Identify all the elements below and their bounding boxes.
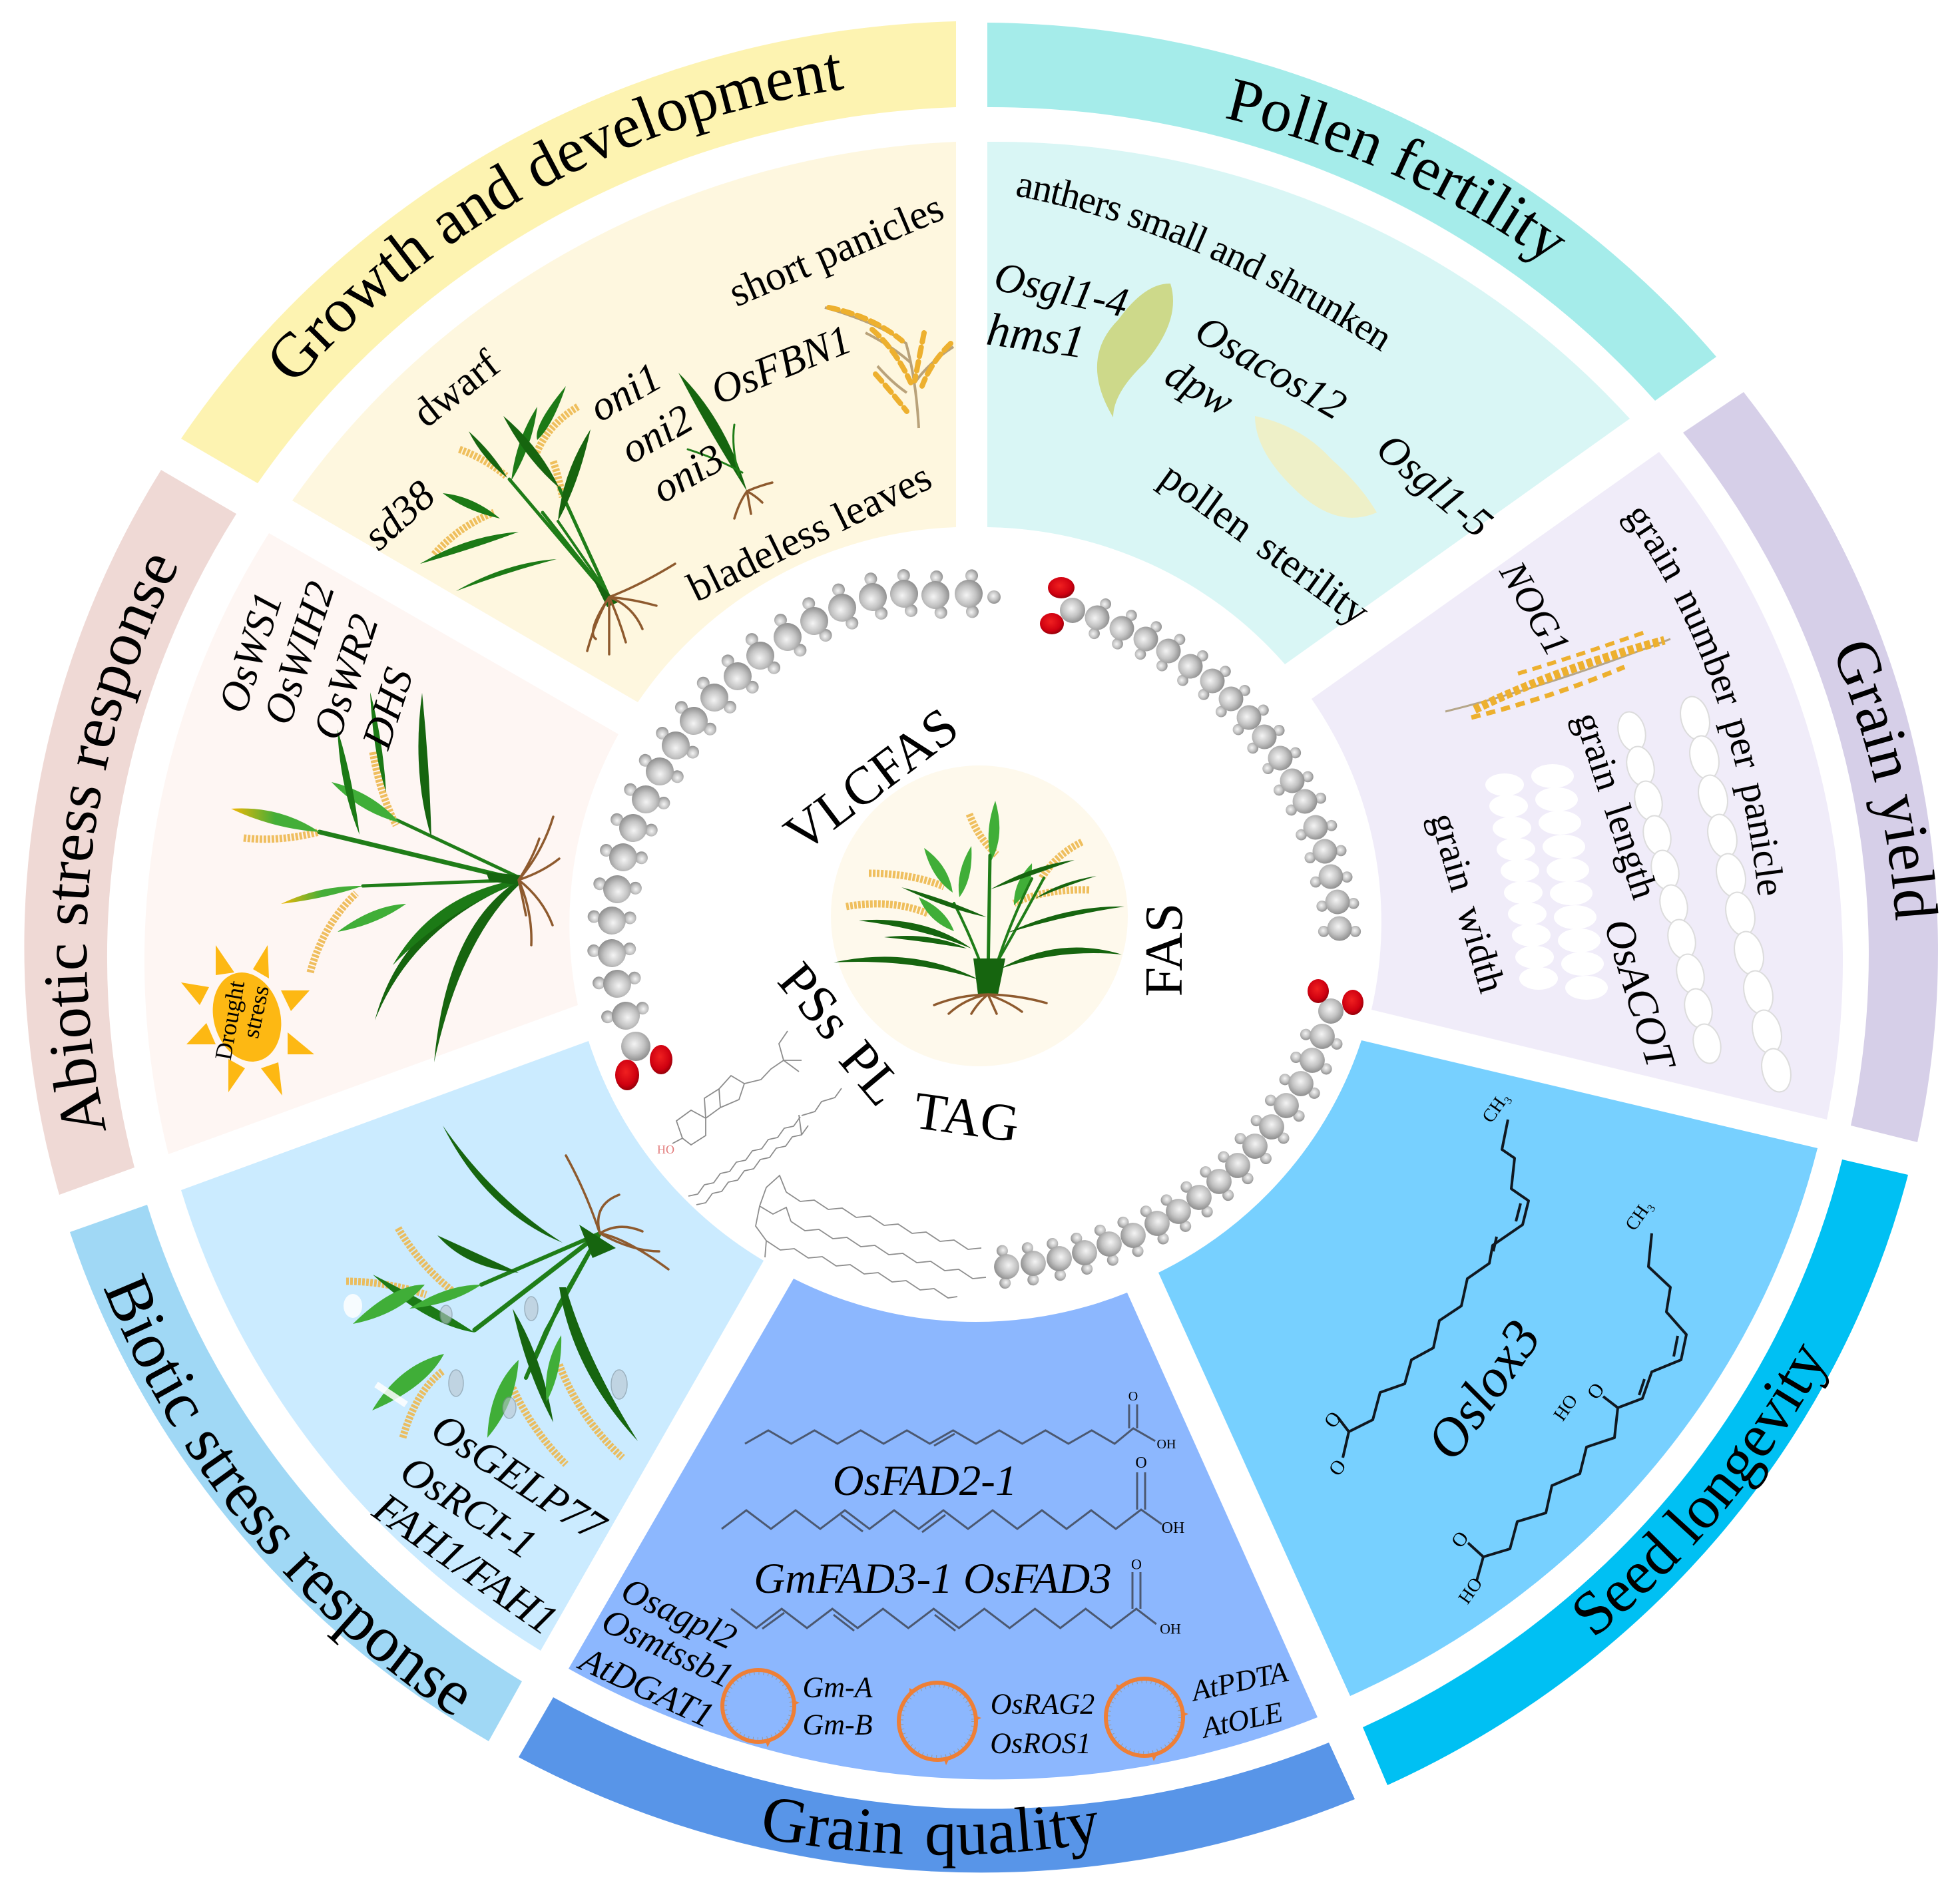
molecule: oleic acid: O [1128,1389,1138,1404]
label: dpw: dpw [1158,349,1242,425]
label: OsWR2: OsWR2 [304,609,387,745]
band: grain quality [519,1697,1355,1873]
band: grain yield [1683,392,1939,1142]
label: anthers small and shrunken: anthers small and shrunken [1017,179,1387,351]
label: AtOLE: AtOLE [1197,1695,1286,1745]
label: PSs: PSs [767,952,863,1050]
molecule: linoleic acid: O [1135,1454,1147,1472]
panel: grain quality [569,1279,1318,1779]
icon: rice plant with insects [344,1126,668,1464]
icon: rice plant dwarf [420,386,675,654]
icon: wide rice grains column 1 [1485,773,1558,990]
label: Osagpl2: Osagpl2 [615,1570,743,1657]
label: Oslox3: Oslox3 [1414,1309,1553,1470]
label: OsRCI-1: OsRCI-1 [392,1446,545,1568]
molecule: hydroperoxide fatty acid [1447,1196,1686,1607]
molecule: phytosterol [657,1031,802,1156]
icon: rice panicle [1445,632,1670,718]
label: PL: PL [828,1029,915,1117]
label: grain length: grain length [1566,707,1667,904]
molecule: triacylglycerol [756,1175,986,1298]
band: seed longevity [1363,1159,1908,1785]
band: pollen fertility [987,23,1716,401]
label: OsRAG2: OsRAG2 [991,1688,1095,1720]
panel: growth and development [292,142,956,702]
band: pollen fertility: Pollen fertility [1226,79,1566,262]
label: Gm-A: Gm-A [802,1671,873,1704]
band: abiotic stress response: Abiotic stress response [45,556,177,1131]
label: dwarf: dwarf [404,341,508,436]
molecule: linoleic acid [1320,1088,1529,1480]
molecule: phytosterol: HO [657,1143,674,1156]
band: growth and development [181,21,956,483]
label: oni1: oni1 [581,353,669,431]
molecule: hydroperoxide fatty acid: O [1583,1379,1609,1403]
label: grain number per panicle: grain number per panicle [1620,509,1783,895]
molecule: hydroperoxide fatty acid: HO [1455,1574,1487,1607]
fatty acid chain: VLCFA left [587,567,1001,1090]
center circle with rice plant [831,765,1128,1066]
molecule: phospholipid [688,1088,842,1205]
fatty acid chain: FAS top right [1040,577,1361,941]
label: grain width: grain width [1421,808,1515,997]
icon: short panicle [825,308,953,428]
label: pollen sterility: pollen sterility [1152,453,1378,634]
label: OsGELP77: OsGELP77 [423,1404,616,1552]
label: OsROS1: OsROS1 [990,1727,1091,1760]
icon: drought sun: stress [237,983,274,1040]
icon: insects [344,1294,627,1418]
molecule: oleic acid: OH [1157,1437,1176,1452]
icon: drought-stressed rice plant [231,692,559,1062]
molecule: linolenic acid: OH [1160,1620,1181,1637]
panel: pollen fertility [983,142,1630,664]
label: VLCFAS: VLCFAS [774,696,969,864]
label: TAG: TAG [911,1081,1023,1154]
label: FAH1/FAH1: FAH1/FAH1 [364,1483,566,1645]
label: hms1: hms1 [983,304,1089,368]
panel: grain yield [1312,452,1843,1120]
label: OsWS1: OsWS1 [209,586,292,718]
label: FAS: FAS [1135,903,1194,996]
molecule: linolenic acid: O [1131,1556,1142,1572]
label: AtDGAT1: AtDGAT1 [573,1638,720,1735]
label: oni3: oni3 [644,435,732,512]
band: abiotic stress response [24,470,236,1195]
label: sd38: sd38 [354,471,444,559]
band: grain quality: Grain quality [764,1799,1097,1868]
molecule: linoleic acid: CH₃ [1478,1088,1514,1127]
panel: seed longevity [1158,1040,1818,1696]
label: AtPDTA: AtPDTA [1187,1655,1292,1708]
band: biotic stress response: Biotic stress response [104,1273,467,1715]
molecule: linoleic acid [722,1454,1184,1537]
label: Osmtssb1: Osmtssb1 [596,1600,740,1696]
label: GmFAD3-1 OsFAD3: GmFAD3-1 OsFAD3 [754,1555,1112,1603]
molecule: linoleic acid: OH [1162,1520,1184,1537]
icon: sterile pollen grain [1255,416,1377,518]
fatty acid chain: bottom right [992,979,1363,1289]
icon: shrunken anther [1097,284,1173,417]
label: OsFAD2-1: OsFAD2-1 [833,1457,1017,1505]
label: Gm-B: Gm-B [802,1708,873,1741]
icon: small bladeless rice seedling [678,373,772,519]
label: NOG1: NOG1 [1491,553,1579,663]
label: Osacos12: Osacos12 [1188,306,1354,429]
label: OsWIH2: OsWIH2 [254,576,344,730]
band: grain yield: Grain yield [1838,642,1939,921]
label: short panicles: short panicles [722,185,950,315]
label: OsACOT: OsACOT [1595,913,1685,1076]
icon: drought sun: Drought [210,978,250,1062]
molecule: linoleic acid: O [1324,1456,1351,1480]
icon: drought sun [181,945,314,1096]
band: growth and development: Growth and development [272,55,844,377]
label: oni2: oni2 [612,395,700,473]
molecule: hydroperoxide fatty acid: CH₃ [1621,1196,1657,1235]
band: seed longevity: Seed longevity [1575,1343,1830,1635]
label: Osgl1-4: Osgl1-4 [990,253,1132,326]
molecule: hydroperoxide fatty acid: O [1447,1528,1473,1552]
icon: oil body 2 [899,1683,981,1765]
molecule: oleic acid [745,1389,1176,1452]
label: bladeless leaves: bladeless leaves [680,454,939,611]
panel: abiotic stress response [144,533,618,1154]
icon: long rice grains column 1 [1614,709,1725,1066]
molecule: linoleic acid: O [1320,1408,1346,1432]
icon: oil body 3 [1106,1679,1188,1761]
icon: wide rice grains column 2 [1531,764,1608,1000]
icon: oil body 1 [722,1670,800,1747]
label: OsFBN1: OsFBN1 [704,315,858,414]
icon: long rice grains column 2 [1676,694,1795,1095]
molecule: hydroperoxide fatty acid: HO [1550,1391,1582,1424]
label: Osgl1-5: Osgl1-5 [1368,424,1501,546]
molecule: linolenic acid [731,1556,1181,1637]
label: DHS: DHS [352,662,422,755]
panel: biotic stress response [181,1041,764,1651]
